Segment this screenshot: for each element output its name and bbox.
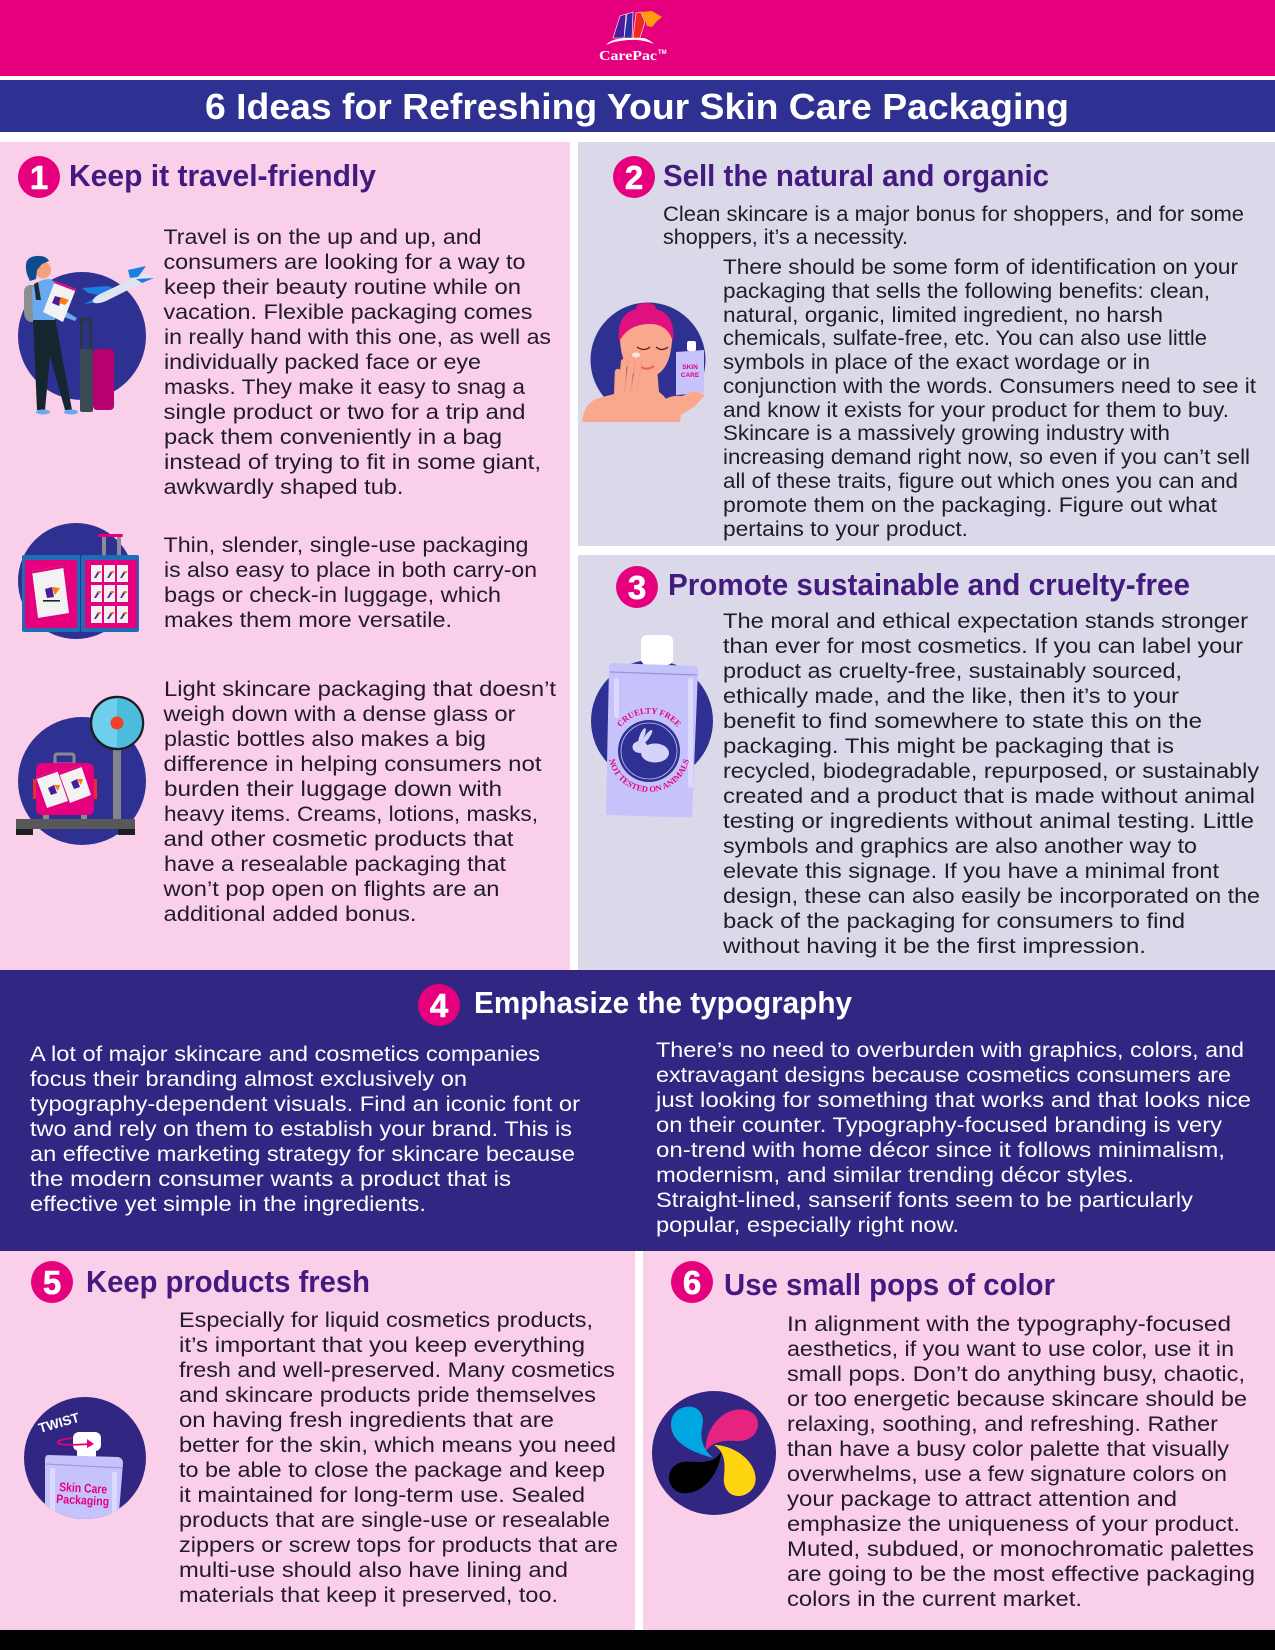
text block: typography left column: A lot of major skincare and cosmetics companies: [30, 1042, 540, 1066]
heading 5: Keep products fresh: [86, 1264, 370, 1299]
text block: keep fresh: and skincare products pride themselves: [179, 1383, 596, 1407]
text block: identification on packaging: all of these traits, figure out which ones you can and: [723, 469, 1238, 493]
number badge 3: 3: [628, 569, 646, 606]
heading 2: Sell the natural and organic: [663, 158, 1049, 193]
icon: CMYK color swirl: [652, 1391, 776, 1515]
text block: keep fresh: [179, 1308, 618, 1607]
text block: travel intro: individually packed face or eye: [164, 350, 481, 374]
panel: promote sustainable and cruelty-free: [578, 555, 1275, 970]
text block: light packaging: additional added bonus.: [164, 902, 416, 926]
text block: identification on packaging: chemicals, sulfate-free, etc. You can also use little: [723, 326, 1207, 350]
text block: typography right column: extravagant designs because cosmetics consumers are: [656, 1063, 1231, 1087]
text block: travel intro: Travel is on the up and up, and: [164, 225, 481, 249]
text block: identification on packaging: [723, 255, 1256, 541]
text block: moral and ethical expectation: elevate this signage. If you have a minimal front: [723, 859, 1219, 883]
text block: identification on packaging: promote them on the packaging. Figure out what: [723, 493, 1217, 517]
text block: keep fresh: better for the skin, which means you need: [179, 1433, 616, 1457]
number badge 6: [671, 1261, 713, 1303]
badge text: CRUELTY FREE: [618, 708, 681, 727]
text block: travel intro: [164, 225, 551, 499]
text block: keep fresh: products that are single-use or resealable: [179, 1508, 610, 1532]
text block: moral and ethical expectation: than ever for most cosmetics. If you can label your: [723, 634, 1243, 658]
text block: small pops of color: [787, 1312, 1255, 1611]
footer bar: [0, 1630, 1275, 1650]
text block: keep fresh: multi-use should also have lining and: [179, 1558, 568, 1582]
text block: moral and ethical expectation: created and a product that is made without animal: [723, 784, 1255, 808]
text block: moral and ethical expectation: design, these can also easily be incorporated on the: [723, 884, 1260, 908]
title band: 6 Ideas for Refreshing Your Skin Care Packaging: [205, 86, 1069, 127]
text block: identification on packaging: There should be some form of identification on your: [723, 255, 1238, 279]
text block: small pops of color: small pops. Don’t do anything busy, chaotic,: [787, 1362, 1245, 1386]
text block: small pops of color: aesthetics, if you want to use color, use it in: [787, 1337, 1234, 1361]
text block: small pops of color: overwhelms, use a few signature colors on: [787, 1462, 1227, 1486]
number badge 3: [616, 566, 658, 608]
icon: cruelty-free pouch: NOT TESTED ON ANIMALS: [609, 758, 689, 792]
text block: travel intro: keep their beauty routine while on: [164, 275, 521, 299]
number badge 2: 2: [625, 159, 643, 196]
text block: small pops of color: In alignment with the typography-focused: [787, 1312, 1231, 1336]
title band: [0, 80, 1275, 132]
number badge 6: 6: [683, 1264, 701, 1301]
text block: single-use packaging: makes them more versatile.: [164, 608, 452, 632]
icon: luggage on a scale: [16, 697, 146, 845]
text block: small pops of color: your package to attract attention and: [787, 1487, 1177, 1511]
text block: small pops of color: relaxing, soothing, and refreshing. Rather: [787, 1412, 1218, 1436]
text block: moral and ethical expectation: benefit to find somewhere to state this on the: [723, 709, 1202, 733]
text block: clean skincare: Clean skincare is a major bonus for shoppers, and for some: [663, 202, 1244, 226]
panel: keep it travel-friendly: [0, 142, 570, 970]
twist label: TWIST: [37, 1410, 82, 1436]
text block: keep fresh: materials that keep it preserved, too.: [179, 1583, 558, 1607]
icon: CarePac logo: TM: [658, 50, 667, 56]
text block: typography right column: on their counter. Typography-focused branding is very: [656, 1113, 1222, 1137]
text block: keep fresh: to be able to close the package and keep: [179, 1458, 605, 1482]
text block: moral and ethical expectation: symbols and graphics are also another way to: [723, 834, 1197, 858]
text block: moral and ethical expectation: product as cruelty-free, sustainably sourced,: [723, 659, 1182, 683]
text block: light packaging: won’t pop open on flights are an: [162, 877, 499, 901]
text block: clean skincare: shoppers, it’s a necessity.: [663, 225, 908, 249]
text block: typography left column: focus their branding almost exclusively on: [30, 1067, 467, 1091]
number badge 1: 1: [30, 159, 48, 196]
panel: emphasize the typography: [0, 970, 1275, 1251]
panel: sell the natural and organic: [578, 142, 1275, 546]
text block: light packaging: Light skincare packaging that doesn’t: [164, 677, 556, 701]
text block: small pops of color: than have a busy color palette that visually: [787, 1437, 1229, 1461]
text block: light packaging: difference in helping consumers not: [164, 752, 542, 776]
text block: keep fresh: it maintained for long-term use. Sealed: [179, 1483, 585, 1507]
text block: keep fresh: fresh and well-preserved. Many cosmetics: [179, 1358, 615, 1382]
text block: identification on packaging: pertains to your product.: [723, 517, 968, 541]
icon: cruelty-free pouch: [591, 635, 713, 818]
text block: small pops of color: or too energetic because skincare should be: [787, 1387, 1247, 1411]
number badge 5: 5: [43, 1264, 61, 1301]
text block: identification on packaging: natural, organic, limited ingredient, no harsh: [723, 303, 1163, 327]
text block: light packaging: weigh down with a dense glass or: [162, 702, 515, 726]
text block: keep fresh: on having fresh ingredients that are: [179, 1408, 554, 1432]
twist arrow: [58, 1438, 89, 1445]
text block: typography right column: There’s no need to overburden with graphics, colors, and: [656, 1038, 1244, 1062]
text block: light packaging: burden their luggage down with: [164, 777, 502, 801]
text block: identification on packaging: packaging that sells the following benefits: clean,: [723, 279, 1210, 303]
text block: travel intro: pack them conveniently in a bag: [164, 425, 502, 449]
text block: typography right column: on-trend with home décor since it follows minimalism,: [656, 1138, 1225, 1162]
text block: travel intro: consumers are looking for a way to: [164, 250, 526, 274]
text block: travel intro: in really hand with this one, as well as: [164, 325, 551, 349]
text block: typography left column: typography-dependent visuals. Find an iconic font or: [30, 1092, 580, 1116]
text block: travel intro: masks. They make it easy to snag a: [164, 375, 525, 399]
text block: single-use packaging: is also easy to place in both carry-on: [164, 558, 537, 582]
heading 3: Promote sustainable and cruelty-free: [668, 567, 1190, 602]
text block: light packaging: heavy items. Creams, lotions, masks,: [164, 802, 538, 826]
text block: typography right column: popular, especially right now.: [656, 1213, 959, 1237]
heading 6: Use small pops of color: [724, 1267, 1055, 1302]
icon: woman applying cream with packet: [582, 302, 706, 422]
text block: moral and ethical expectation: The moral and ethical expectation stands stronger: [723, 609, 1248, 633]
logo wordmark: CarePac: [599, 49, 657, 64]
text block: light packaging: plastic bottles also makes a big: [164, 727, 486, 751]
text block: typography left column: the modern consumer wants a product that is: [30, 1167, 511, 1191]
text block: keep fresh: it’s important that you keep everything: [179, 1333, 585, 1357]
text block: travel intro: instead of trying to fit in some giant,: [164, 450, 541, 474]
panel: keep products fresh: [0, 1251, 635, 1630]
text block: moral and ethical expectation: testing or ingredients without animal testing. Little: [723, 809, 1254, 833]
text block: typography right column: just looking for something that works and that looks nice: [655, 1088, 1251, 1112]
text block: light packaging: and other cosmetic products that: [164, 827, 514, 851]
number badge 4: [418, 984, 460, 1026]
text block: typography left column: an effective marketing strategy for skincare because: [30, 1142, 575, 1166]
icon: woman applying cream with packet: CARE: [681, 372, 700, 379]
text block: travel intro: single product or two for a trip and: [164, 400, 526, 424]
text block: moral and ethical expectation: recycled, biodegradable, repurposed, or sustainably: [723, 759, 1259, 783]
text block: single-use packaging: Thin, slender, single-use packaging: [164, 533, 528, 557]
icon: twist-cap pouch: Packaging: [56, 1492, 110, 1509]
text block: small pops of color: colors in the current market.: [787, 1587, 1082, 1611]
text block: clean skincare: [663, 202, 1244, 249]
icon: traveler with suitcase and airplane: [18, 256, 154, 414]
text block: identification on packaging: and know it exists for your product for them to buy.: [723, 398, 1229, 422]
icon: open suitcase with packets: [18, 523, 139, 639]
text block: travel intro: awkwardly shaped tub.: [164, 475, 404, 499]
text block: keep fresh: zippers or screw tops for products that are: [179, 1533, 618, 1557]
text block: small pops of color: Muted, subdued, or monochromatic palettes: [787, 1537, 1254, 1561]
text block: moral and ethical expectation: [722, 609, 1260, 958]
text block: typography left column: two and rely on them to establish your brand. This is: [30, 1117, 572, 1141]
heading 1: Keep it travel-friendly: [69, 158, 377, 193]
text block: typography left column: effective yet simple in the ingredients.: [30, 1192, 426, 1216]
pouch label: Skin Care: [59, 1480, 108, 1497]
text block: light packaging: [162, 677, 556, 926]
text block: single-use packaging: bags or check-in luggage, which: [164, 583, 501, 607]
text block: typography left column: [30, 1042, 580, 1216]
icon: twist-cap pouch: [24, 1397, 146, 1525]
text block: typography right column: Straight-lined, sanserif fonts seem to be particularly: [656, 1188, 1193, 1212]
panel: use small pops of color: [643, 1251, 1275, 1630]
text block: identification on packaging: symbols in place of the exact wordage or in: [723, 350, 1150, 374]
number badge 2: [613, 156, 655, 198]
number badge 1: [18, 156, 60, 198]
text block: identification on packaging: conjunction with the words. Consumers need to see it: [723, 374, 1256, 398]
text block: small pops of color: emphasize the uniqueness of your product.: [787, 1512, 1240, 1536]
number badge 4: 4: [430, 987, 449, 1024]
text block: typography right column: modernism, and similar trending décor styles.: [656, 1163, 1134, 1187]
packet label: SKIN: [682, 364, 698, 371]
text block: moral and ethical expectation: ethically made, and the like, then it’s to your: [723, 684, 1179, 708]
text block: light packaging: have a resealable packaging that: [164, 852, 506, 876]
number badge 5: [31, 1261, 73, 1303]
text block: identification on packaging: increasing demand right now, so even if you can’t sell: [723, 445, 1250, 469]
heading 4: Emphasize the typography: [474, 985, 853, 1020]
text block: keep fresh: Especially for liquid cosmetics products,: [179, 1308, 593, 1332]
text block: moral and ethical expectation: packaging. This might be packaging that is: [723, 734, 1174, 758]
icon: CarePac logo: [599, 11, 667, 64]
text block: moral and ethical expectation: back of the packaging for consumers to find: [723, 909, 1185, 933]
text block: moral and ethical expectation: without having it be the first impression.: [722, 934, 1146, 958]
text block: single-use packaging: [164, 533, 537, 632]
text block: typography right column: [655, 1038, 1251, 1237]
text block: travel intro: vacation. Flexible packaging comes: [164, 300, 532, 324]
header band with logo: [0, 0, 1275, 76]
text block: identification on packaging: Skincare is a massively growing industry with: [723, 421, 1170, 445]
text block: small pops of color: are going to be the most effective packaging: [787, 1562, 1255, 1586]
